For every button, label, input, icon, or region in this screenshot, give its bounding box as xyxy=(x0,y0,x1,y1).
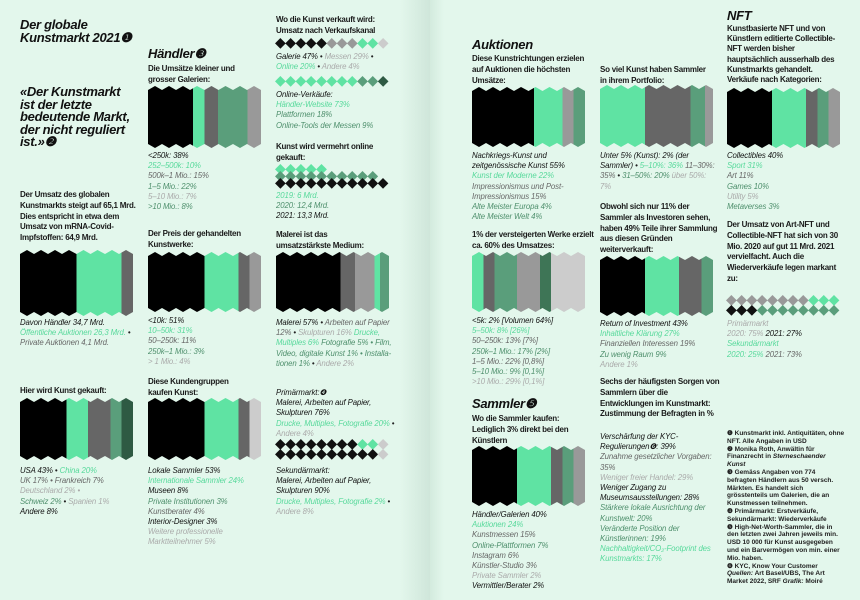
title xyxy=(20,17,132,45)
caption: Online: Online-Verkäufe: xyxy=(276,90,333,99)
caption: Sorgen: Veränderte Position der Künstlerinnen: 19% xyxy=(600,524,679,543)
text: online gekauft: Kunst wird vermehrt online gekauft: xyxy=(276,142,373,162)
caption: NFT Markt: 2020: 25% 2021: 73% xyxy=(727,350,802,359)
caption: 1%: 1–5 Mio.: 22% [0,8%] xyxy=(472,357,544,366)
caption: Kunstrichtungen: Impressionismus und Post-Impressionismus 15% xyxy=(472,182,564,201)
caption: NFT: Games 10% xyxy=(727,182,769,191)
heading: NFT: NFT xyxy=(727,8,751,23)
caption: Galerien: <250k: 38% xyxy=(148,151,188,160)
caption: 1% xyxy=(472,316,554,386)
caption: Sammler xyxy=(472,510,548,590)
diamonds: Online: ◆◆◆◆◆◆◆◆◆◆◆ xyxy=(275,73,388,89)
chart: Sammler xyxy=(472,446,585,506)
caption: Kundengruppen: Lokale Sammler 53% xyxy=(148,466,220,475)
caption: Kunstrichtungen: Alte Meister Welt 4% xyxy=(472,212,542,221)
text: Verkaufskanal: Wo die Kunst verkauft wird: Umsatz nach Verkaufskanal xyxy=(276,15,375,35)
chart: Kundengruppen xyxy=(148,398,261,460)
caption: Primärmarkt: Malerei, Arbeiten auf Papier, Skulpturen 76% xyxy=(276,398,371,417)
chart: Galerien xyxy=(148,86,261,148)
caption: online xyxy=(276,191,329,220)
caption: Gründe: Return of Investment 43% xyxy=(600,319,688,328)
caption: Gründe: Inhaltliche Klärung 27% xyxy=(600,329,680,338)
chart: Länder xyxy=(20,398,133,460)
text: NFT: Kunstbasierte NFT und von Künstlern editierte Collecti­ble-NFT werden bisher hauptsächlich ausserhalb des Kunstmarkts gehandelt. Verkäufe nach Kategorien: xyxy=(727,24,835,84)
text: 1%: 1% der versteigerten Werke erzielt ca. 60% des Umsatzes: xyxy=(472,230,594,250)
caption: 1%: >10 Mio.: 29% [0,1%] xyxy=(472,377,544,386)
caption: Online xyxy=(276,90,373,130)
caption: Gründe: Finanziellen Interessen 19% xyxy=(600,339,695,348)
caption: Kundengruppen xyxy=(148,466,244,546)
text: Portfolio: So viel Kunst haben Sammler in ihrem Portfolio: xyxy=(600,65,706,85)
caption: Sammler: Vermittler/Berater 2% xyxy=(472,581,544,590)
caption: NFT: Utility 5% xyxy=(727,192,758,201)
caption: NFT: Metaverses 3% xyxy=(727,202,779,211)
caption: Sammler: Instagram 6% xyxy=(472,551,519,560)
caption: Primärmarkt: Primärmarkt:❹ xyxy=(276,388,326,397)
title: Der globale xyxy=(20,17,88,32)
chart: Preis xyxy=(148,252,261,312)
diamonds: Markt xyxy=(275,436,388,462)
caption: Kundengruppen: Private Institutionen 3% xyxy=(148,497,228,506)
footnotes xyxy=(727,430,844,585)
caption: Online: Plattformen 18% xyxy=(276,110,332,119)
chart: NFT xyxy=(727,88,840,148)
footnotes: Quellen: Art Basel/UBS, The Art Market 2022, SRF Grafik: Moiré xyxy=(727,570,825,585)
caption: Sorgen xyxy=(600,432,712,563)
text: Preis: Der Preis der gehandelten Kunstwerke: xyxy=(148,229,241,249)
diamonds: Markt: ◆◆◆◆◆◆◆◆◆◆◆ xyxy=(275,436,388,452)
chart: Medium xyxy=(276,252,389,312)
chart: Kunstrichtungen xyxy=(472,87,585,147)
caption: 1%: 5–50k: 8% [26%] xyxy=(472,326,529,335)
diamonds: online: ◆◆◆◆◆ xyxy=(275,161,326,177)
caption: Sekundärmarkt: Sekundärmarkt: xyxy=(276,466,330,475)
caption: online: 2021: 13,3 Mrd. xyxy=(276,211,329,220)
caption: Galerien: >10 Mio.: 8% xyxy=(148,202,193,211)
footnotes: ❻ KYC, Know Your Customer xyxy=(727,563,818,570)
text: Kunstrichtungen: Diese Kunstrichtungen erzielen auf Auktionen die höchsten Umsätze: xyxy=(472,54,584,85)
caption: Kunstrichtungen xyxy=(472,151,565,221)
diamonds: Verkaufskanal: ◆◆◆◆◆◆◆◆◆◆◆ xyxy=(275,35,388,51)
caption: NFT Markt xyxy=(727,319,802,359)
caption: Gründe: Andere 1% xyxy=(600,360,638,369)
diamonds: NFT: ◆◆◆◆◆◆◆◆◆◆◆ xyxy=(726,292,839,308)
caption: Preis: 10–50k: 31% xyxy=(148,326,192,335)
caption: Online: Online-Tools der Messen 9% xyxy=(276,121,373,130)
caption: Verkaufskanal: Galerie 47% • Messen 29% • Online 20% • Andere 4% xyxy=(276,52,373,71)
caption: Online: Händler-Website 73% xyxy=(276,100,350,109)
caption: Preis: > 1 Mio.: 4% xyxy=(148,357,190,366)
heading: Auktionen: Auktionen xyxy=(472,37,533,52)
caption: Kunstrichtungen: Nachkriegs-Kunst und zeitgenössische Kunst 55% xyxy=(472,151,565,170)
text: Galerien: Die Umsätze kleiner und grosser Galerien: xyxy=(148,64,235,84)
caption: Medium: Malerei 57% • Arbeiten auf Papier 12% • Skulpturen 16% Drucke, Multiples 6% Fotografie 5% • Film, Video, digitale Kunst 1% • Installa­tionen 1% • Andere 2% xyxy=(276,318,392,368)
caption: Primärmarkt xyxy=(276,388,394,438)
caption: Galerien: 1–5 Mio.: 22% xyxy=(148,182,197,191)
diamonds: online: ◆◆◆◆◆◆◆◆◆◆ xyxy=(275,168,378,184)
caption: NFT: Art 11% xyxy=(727,171,753,180)
caption: Länder: Schweiz 2% • Spanien 1% xyxy=(20,497,109,506)
caption: 1%: <5k: 2% [Volumen 64%] xyxy=(472,316,553,325)
chart: Gründe xyxy=(600,256,713,316)
diamonds: online xyxy=(275,161,388,191)
caption: Sammler: Online-Plattformen 7% xyxy=(472,541,548,550)
caption: Sorgen: Stärkere lokale Ausrichtung der Kunstwelt: 20% xyxy=(600,503,705,523)
caption: 1%: 250k–1 Mio.: 17% [2%] xyxy=(472,347,550,356)
caption: Sammler: Künstler-Studio 3% xyxy=(472,561,537,570)
caption: Galerien: 252–500k: 10% xyxy=(148,161,201,170)
caption: Länder: Deutschland 2% • xyxy=(20,486,80,495)
caption: Kundengruppen: Interior-Designer 3% xyxy=(148,517,217,526)
caption: Kunstrichtungen: Kunst der Moderne 22% xyxy=(472,171,554,180)
text: Sammler: Wo die Sammler kaufen: Lediglich 3% direkt bei den Künstlern xyxy=(472,414,568,445)
caption: NFT: Sport 31% xyxy=(727,161,763,170)
caption: Sekundärmarkt xyxy=(276,466,390,516)
diamonds: NFT xyxy=(726,292,840,318)
caption: Gründe: Zu wenig Raum 9% xyxy=(600,350,666,359)
caption: NFT Markt: 2020: 75% 2021: 27% xyxy=(727,329,802,338)
caption: online: 2020: 12,4 Mrd. xyxy=(276,201,329,210)
caption: Kundengruppen: Weitere professionelle Marktteilnehmer 5% xyxy=(148,527,223,546)
caption: Kundengruppen: Kunstberater 4% xyxy=(148,507,205,516)
title: Kunstmarkt 2021❶ xyxy=(20,30,132,45)
caption: Sorgen: Nachhaltigkeit/CO₂-Foot­print des Kunstmarkts: 17% xyxy=(600,544,711,563)
text: Umsatz: Der Umsatz des globalen Kunstmarkts steigt auf 65,1 Mrd. Dies entspricht in etwa dem Umsatz von mRNA-Covid-Impfstoffen: 64,9 Mrd. xyxy=(20,190,136,242)
footnotes: ❺ High-Net-Worth-Sammler, die in den letzten zwei Jahren jeweils min. USD 10 000 für Kunst ausgegeben und ein Barvermögen von min. einer Mio. haben. xyxy=(727,524,840,562)
caption: Galerien xyxy=(148,151,209,211)
heading: Händler: Händler❸ xyxy=(148,46,206,61)
caption: Länder: Andere 8% xyxy=(20,507,58,516)
caption: Galerien: 500k–1 Mio.: 15% xyxy=(148,171,209,180)
caption: Sammler: Private Sammler 2% xyxy=(472,571,541,580)
caption: Kundengruppen: Internationale Sammler 24% xyxy=(148,476,244,485)
text: NFT Umsatz: Der Umsatz von Art-NFT und Collectible-NFT hat sich von 30 Mio. 2020 auf gut 11 Mrd. 2021 vervielfacht. Auch die Wiederverkäufe legen markant zu: xyxy=(727,220,838,283)
footnotes: ❶ Kunstmarkt inkl. Antiquitäten, ohne NFT. Alle Angaben in USD xyxy=(727,430,844,445)
text: Malerei: Malerei ist das umsatzstärkste Medium: xyxy=(276,230,364,250)
caption: Umsatz: Davon Händler 34,7 Mrd. Öffentliche Auktionen 26,3 Mrd. • Private Auktionen 4,1 Mrd. xyxy=(20,318,131,347)
caption: Portfolio: Unter 5% (Kunst): 2% (der Sammler) • 5–10%: 36% 11–30%: 35% • 31–50%: 20% über 50%: 7% xyxy=(600,151,715,191)
caption: Länder: USA 43% • China 20% xyxy=(20,466,97,475)
caption: NFT Markt: Primärmarkt xyxy=(727,319,768,328)
caption: online: 2019: 6 Mrd. xyxy=(276,191,319,200)
footnotes: ❷ Monika Roth, Anwältin für Finanzrecht in Sterneschaender Kunst xyxy=(727,446,826,468)
caption: NFT xyxy=(726,151,783,211)
caption: 1%: 5–10 Mio.: 9% [0,1%] xyxy=(472,367,544,376)
quote: «Der Kunstmarkt ist der letzte bedeutende Markt, der nicht reguliert ist.»❷ xyxy=(20,84,130,149)
caption: Sammler: Auktionen 24% xyxy=(472,520,523,529)
text: Investoren: Obwohl sich nur 11% der Sammler als Investoren sehen, haben 49% Teile ihrer Sammlung aus diesen Gründen weiterverkauft: xyxy=(600,202,717,254)
caption: Primärmarkt: Drucke, Multiples, Foto­grafie 20% • Andere 4% xyxy=(276,419,394,438)
diamonds: Markt: ◆◆◆◆◆◆◆◆◆◆◆ xyxy=(275,446,388,462)
chart: Umsatz xyxy=(20,250,133,316)
caption: Galerien: 5–10 Mio.: 7% xyxy=(148,192,197,201)
caption: Preis: 250k–1 Mio.: 3% xyxy=(148,347,205,356)
caption: Sorgen: Verschärfung der KYC-Regulierungen❻: 39% xyxy=(600,432,678,451)
caption: Länder xyxy=(20,466,110,516)
caption: Sammler: Kunstmessen 15% xyxy=(472,530,536,539)
diamonds: online: ◆◆◆◆◆◆◆◆◆◆◆ xyxy=(275,175,388,191)
caption: Gründe xyxy=(600,319,695,369)
caption: NFT: Collectibles 40% xyxy=(727,151,783,160)
caption: Sorgen: Zunahme gesetzlicher Vorgaben: 35% xyxy=(600,452,712,472)
caption: Preis: 50–250k: 11% xyxy=(148,336,196,345)
caption: Länder: UK 17% • Frankreich 7% xyxy=(20,476,104,485)
caption: Sekundärmarkt: Drucke, Multiples, Foto­grafie 2% • Andere 8% xyxy=(276,497,390,516)
diamonds: NFT: ◆◆◆◆◆◆◆◆◆◆◆ xyxy=(726,302,839,318)
caption: Kundengruppen: Museen 8% xyxy=(148,486,188,495)
chart: Portfolio xyxy=(600,85,713,147)
text: Sorgen: Sechs der häufigsten Sorgen von Sammlern über die Entwicklungen im Kunstmarkt: Zustimmung der Befragten in % xyxy=(600,377,719,418)
caption: Preis xyxy=(148,316,205,366)
caption: Kunstrichtungen: Alte Meister Europa 4% xyxy=(472,202,552,211)
footnotes: ❹ Primärmarkt: Erstverkäufe, Sekundärmarkt: Wiederverkäufe xyxy=(727,508,827,523)
caption: 1%: 50–250k: 13% [7%] xyxy=(472,336,538,345)
heading: Hier wird Kunst gekauft: Hier wird Kunst gekauft: xyxy=(20,386,106,395)
caption: Preis: <10k: 51% xyxy=(148,316,184,325)
heading: Sammler: Sammler❺ xyxy=(472,396,536,411)
footnotes: ❸ Gemäss Angaben von 774 befragten Händlern aus 50 versch. Märkten. Es handelt sich grösstenteils um Galerien, die an Kunstmessen teilnehmen. xyxy=(727,469,833,507)
text: Kundengruppen: Diese Kundengruppen kaufen Kunst: xyxy=(148,377,229,397)
caption: Sorgen: Weniger Zugang zu Museumsausstellungen: 28% xyxy=(600,483,699,502)
caption: Sekundärmarkt: Malerei, Arbeiten auf Papier, Skulpturen 90% xyxy=(276,476,371,495)
caption: Sammler: Händler/Galerien 40% xyxy=(472,510,547,519)
chart: 1% xyxy=(472,252,585,312)
caption: NFT Markt: Sekundärmarkt xyxy=(727,339,779,348)
caption: Sorgen: Weniger freier Handel: 29% xyxy=(600,473,693,482)
